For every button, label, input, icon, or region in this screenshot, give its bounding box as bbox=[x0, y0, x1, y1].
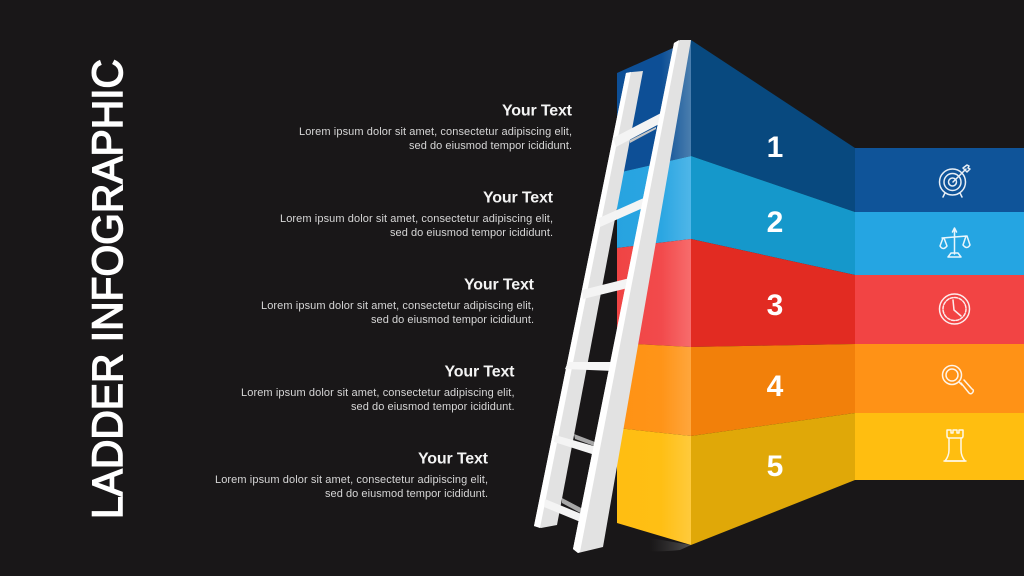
step 2 text: sed do eiusmod tempor icididunt. bbox=[390, 227, 553, 239]
step 1 text: sed do eiusmod tempor icididunt. bbox=[409, 140, 572, 152]
floor glow bbox=[650, 538, 691, 551]
rung 6 bbox=[544, 498, 584, 523]
step 3 text: Lorem ipsum dolor sit amet, consectetur adipiscing elit, bbox=[261, 300, 534, 312]
step 5 text bbox=[215, 450, 489, 500]
right bands bbox=[855, 148, 1024, 480]
icon: chess rook bbox=[944, 430, 966, 461]
rung 2 bbox=[599, 197, 646, 227]
step 2 text: Lorem ipsum dolor sit amet, consectetur adipiscing elit, bbox=[280, 213, 553, 225]
step 5 text: sed do eiusmod tempor icididunt. bbox=[325, 488, 488, 500]
rung 5 bbox=[554, 434, 597, 455]
number 3: 3 bbox=[767, 289, 783, 322]
rung 1 bbox=[613, 112, 663, 147]
step 1 text bbox=[299, 102, 573, 152]
step 4 text: Lorem ipsum dolor sit amet, consectetur adipiscing elit, bbox=[241, 387, 514, 399]
ladder bbox=[534, 40, 691, 553]
step 2 text: Your Text bbox=[483, 190, 554, 206]
step 5 text: Your Text bbox=[418, 450, 489, 468]
step 4 text: sed do eiusmod tempor icididunt. bbox=[351, 401, 514, 413]
number 1: 1 bbox=[767, 131, 783, 164]
step 4 text bbox=[241, 364, 515, 413]
number 2: 2 bbox=[767, 206, 783, 239]
right rail bbox=[573, 40, 691, 553]
icon: target bbox=[940, 165, 970, 197]
rung 3 bbox=[582, 278, 630, 299]
step 5 text: Lorem ipsum dolor sit amet, consectetur adipiscing elit, bbox=[215, 474, 488, 486]
step 2 text bbox=[280, 190, 554, 239]
step 3 text bbox=[261, 276, 535, 326]
icon: scales bbox=[940, 228, 970, 257]
step 1 text: Your Text bbox=[502, 102, 573, 120]
rung 4 bbox=[565, 362, 615, 371]
title: LADDER INFOGRAPHIC bbox=[84, 59, 132, 519]
number 4: 4 bbox=[767, 370, 784, 403]
icon: magnifier bbox=[942, 366, 973, 394]
step 3 text: sed do eiusmod tempor icididunt. bbox=[371, 314, 534, 326]
tower: middle faces with numbers bbox=[691, 40, 855, 545]
step 3 text: Your Text bbox=[464, 276, 535, 294]
icon: clock bbox=[940, 294, 970, 324]
step 1 text: Lorem ipsum dolor sit amet, consectetur adipiscing elit, bbox=[299, 126, 572, 138]
number 5: 5 bbox=[767, 450, 783, 483]
step 4 text: Your Text bbox=[444, 364, 515, 380]
tower: left faces bbox=[617, 40, 691, 545]
left rail bbox=[534, 71, 643, 528]
